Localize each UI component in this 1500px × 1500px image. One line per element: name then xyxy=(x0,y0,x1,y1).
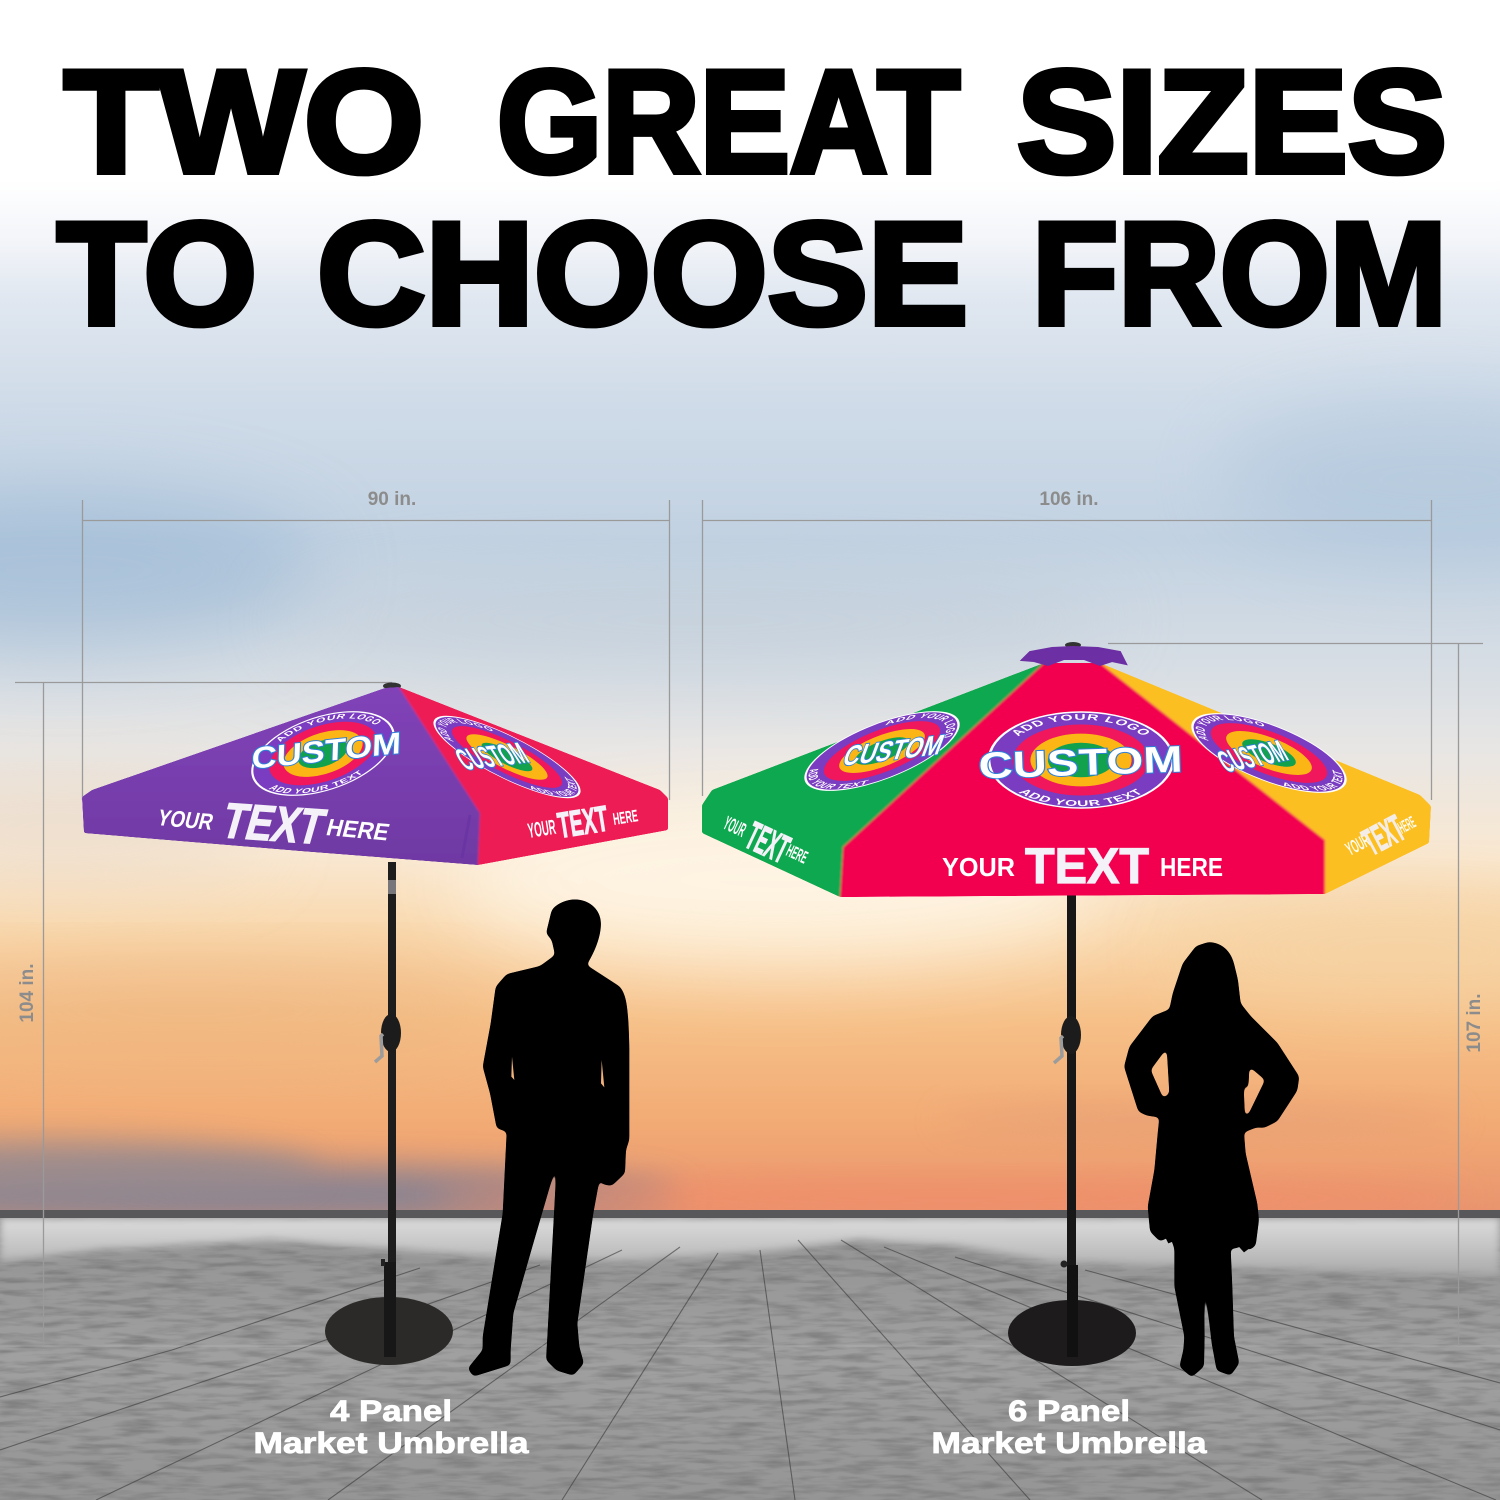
logo on green panel: ADD YOUR LOGO xyxy=(885,713,956,738)
title: TWO xyxy=(64,40,424,203)
pole and base xyxy=(1008,895,1136,1366)
panel text purple: TEXT xyxy=(216,792,332,855)
logo on green panel xyxy=(804,711,960,791)
logo on red panel: ADD YOUR TEXT xyxy=(530,776,577,796)
panel text green: YOUR xyxy=(720,813,749,842)
logo on red panel: ADD YOUR TEXT xyxy=(1018,788,1140,806)
title: SIZES xyxy=(1017,40,1447,203)
panel text purple: YOUR xyxy=(155,805,216,835)
panel text red: TEXT xyxy=(555,798,611,846)
panel text red: YOUR xyxy=(942,852,1015,882)
label: 6 panel market umbrella xyxy=(932,1395,1207,1460)
title: FROM xyxy=(1032,192,1447,355)
panel text red xyxy=(942,838,1223,894)
panel text purple: HERE xyxy=(323,815,392,846)
panel text yellow: YOUR xyxy=(1342,831,1374,860)
title xyxy=(57,40,1447,355)
cap xyxy=(1022,642,1126,665)
man silhouette xyxy=(468,899,629,1377)
title: GREAT xyxy=(497,40,960,203)
logo on purple panel: ADD YOUR LOGO xyxy=(277,714,381,742)
panel text red: YOUR xyxy=(526,816,557,843)
label: 6 panel market umbrella: Market Umbrella xyxy=(932,1427,1207,1460)
logo on purple panel: CUSTOM xyxy=(251,727,402,776)
panel text yellow xyxy=(1342,808,1419,864)
logo on yellow panel: ADD YOUR TEXT xyxy=(1284,770,1343,791)
logo on yellow panel: CUSTOM xyxy=(1211,734,1294,779)
label: 6 panel market umbrella: 6 Panel xyxy=(1008,1395,1130,1428)
logo on red panel: ADD YOUR LOGO xyxy=(438,718,493,742)
dimension: 104 in. height: 104 in. xyxy=(17,963,38,1023)
dimension: 107 in. height: 107 in. xyxy=(1464,993,1485,1053)
canopy panels xyxy=(702,663,1431,897)
dimension: 104 in. height xyxy=(15,682,392,1346)
logo on red panel: ADD YOUR LOGO xyxy=(1012,714,1149,736)
title: TO xyxy=(57,192,257,355)
panel text green: HERE xyxy=(783,840,811,868)
logo on red panel xyxy=(433,716,581,798)
logo on yellow panel: ADD YOUR LOGO xyxy=(1196,716,1264,741)
logo on yellow panel xyxy=(1191,713,1347,793)
woman silhouette xyxy=(1124,942,1299,1377)
panel text red xyxy=(526,798,639,846)
label: 4 panel market umbrella: 4 Panel xyxy=(330,1395,452,1428)
logo on green panel: CUSTOM xyxy=(839,730,948,772)
6 panel umbrella xyxy=(702,642,1431,1373)
panel text red: HERE xyxy=(1160,852,1223,882)
title: CHOOSE xyxy=(317,192,968,355)
logo on purple panel xyxy=(251,711,402,796)
dimension: 90 in. width xyxy=(82,489,670,800)
panel text purple xyxy=(155,792,392,855)
label: 4 panel market umbrella xyxy=(254,1395,529,1460)
logo on red panel: CUSTOM xyxy=(449,736,535,776)
logo on green panel: ADD YOUR TEXT xyxy=(808,768,869,789)
logo on red panel: CUSTOM xyxy=(978,738,1183,787)
dimension: 106 in. width: 106 in. xyxy=(1039,489,1099,510)
panel text yellow: TEXT xyxy=(1357,808,1412,864)
logo on purple panel: ADD YOUR TEXT xyxy=(268,770,362,794)
label: 4 panel market umbrella: Market Umbrella xyxy=(254,1427,529,1460)
dimension: 107 in. height xyxy=(1108,643,1485,1346)
panel text red: HERE xyxy=(612,806,639,829)
panel text green: TEXT xyxy=(739,814,796,872)
canopy panels xyxy=(82,682,668,865)
dimension: 90 in. width: 90 in. xyxy=(368,489,416,510)
floor xyxy=(0,1210,1500,1500)
dimension: 106 in. width xyxy=(702,489,1432,800)
4 panel umbrella xyxy=(82,682,668,1365)
logo on red panel xyxy=(978,711,1183,809)
panel text red: TEXT xyxy=(1025,838,1149,894)
6 panel umbrella: HERE xyxy=(1395,813,1419,838)
pole and base xyxy=(325,862,453,1365)
panel text green xyxy=(720,813,811,872)
